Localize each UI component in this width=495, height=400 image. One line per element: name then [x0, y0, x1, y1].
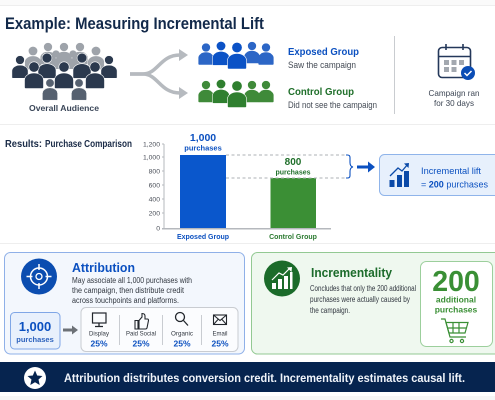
- text: incrementality description: the campaign.: [310, 306, 350, 315]
- value: 800 purchases: 800: [285, 157, 302, 168]
- y axis: [143, 142, 164, 232]
- bar: exposed group: [180, 155, 226, 228]
- labels: channels: Email: [212, 330, 228, 338]
- icon: control group people: [198, 79, 274, 108]
- arrow: to touchpoints: [63, 326, 78, 334]
- icon: rising bars: [390, 163, 409, 187]
- panel: attribution: [4, 252, 244, 354]
- arrows: audience split: [130, 49, 188, 99]
- text: attribution description: [72, 276, 192, 305]
- callout: incremental lift: [380, 154, 495, 196]
- text: campaign duration: [428, 88, 480, 108]
- panel: incrementality: [252, 252, 495, 354]
- text: control group: [288, 86, 377, 110]
- box: 200 additional purchases: [420, 262, 492, 346]
- box: 200 additional purchases: purchases: [435, 304, 478, 314]
- heading: incrementality: Incrementality: [311, 265, 393, 280]
- values: 25% shares: 25%: [173, 338, 191, 348]
- labels: channels: Paid Social: [126, 330, 156, 338]
- labels: channels: [89, 330, 228, 338]
- icon: search: [176, 312, 188, 326]
- icon: star: [24, 367, 46, 389]
- values: 25% shares: 25%: [211, 338, 229, 348]
- box: 200 additional purchases: additional: [436, 294, 476, 304]
- callout: incremental lift: Incremental lift: [421, 166, 481, 177]
- box: 1,000 purchases: 1,000: [19, 319, 51, 334]
- callout: incremental lift: = 200 purchases: [421, 180, 488, 190]
- icon: exposed group people: [198, 41, 274, 69]
- y axis: 1,200: [143, 142, 160, 148]
- bar chart: purchase comparison: [143, 132, 347, 241]
- heading: results: Results:: [5, 138, 42, 150]
- y axis: 400: [149, 196, 160, 204]
- brace: difference: [346, 155, 353, 178]
- icon: calendar: [438, 44, 475, 80]
- values: 25% shares: [90, 338, 229, 348]
- text: exposed group: [288, 46, 359, 70]
- box: 200 additional purchases: 200: [432, 266, 480, 298]
- y axis: 200: [149, 210, 160, 218]
- icon: shopping cart: [441, 319, 468, 343]
- values: 25% shares: 25%: [132, 338, 150, 348]
- heading: attribution: Attribution: [72, 260, 135, 275]
- box: touchpoints: [81, 308, 238, 352]
- category labels: [177, 234, 317, 241]
- y axis: 800: [149, 168, 160, 176]
- text: exposed group: Saw the campaign: [288, 60, 356, 70]
- text: incrementality description: purchases were actually caused by: [310, 295, 410, 304]
- category labels: Exposed Group: [177, 234, 229, 241]
- value: 800 purchases: purchases: [275, 170, 311, 176]
- text: attribution description: the campaign, then distribute credit: [72, 286, 185, 295]
- box: 1,000 purchases: purchases: [16, 335, 54, 344]
- text: attribution description: across touchpoints and platforms.: [72, 296, 179, 305]
- value: 1,000 purchases: 1,000: [190, 132, 216, 144]
- text: incrementality description: [310, 284, 416, 315]
- values: 25% shares: 25%: [90, 338, 108, 348]
- category labels: Control Group: [269, 234, 317, 241]
- text: incrementality description: Concludes that only the 200 additional: [310, 284, 416, 293]
- y axis: 1,000: [143, 154, 160, 162]
- text: control group: Control Group: [288, 86, 354, 98]
- arrow: to incremental lift: [357, 162, 375, 172]
- value: 800 purchases: [275, 157, 311, 176]
- labels: channels: Display: [89, 330, 110, 338]
- icon: growth chart: [264, 260, 300, 296]
- text: control group: Did not see the campaign: [288, 100, 377, 110]
- icon: target: [21, 258, 57, 294]
- text: attribution description: May associate all 1,000 purchases with: [72, 276, 192, 285]
- value: 1,000 purchases: purchases: [184, 144, 222, 152]
- icon: email: [214, 315, 226, 324]
- icon: thumbs up: [135, 314, 148, 329]
- labels: channels: Organic: [171, 330, 194, 338]
- title: Example: Measuring Incremental Lift: [5, 15, 264, 33]
- text: exposed group: Exposed Group: [288, 46, 359, 58]
- y axis: 0: [156, 226, 160, 232]
- value: 1,000 purchases: [184, 132, 222, 152]
- heading: results: Purchase Comparison: [45, 139, 132, 150]
- icon: overall audience crowd: [12, 43, 117, 100]
- heading: results: [5, 138, 132, 150]
- box: 1,000 purchases: [10, 312, 60, 349]
- bar: control group: [270, 178, 316, 228]
- text: campaign duration: Campaign ran: [428, 88, 480, 98]
- banner: key takeaway: [0, 362, 495, 392]
- label: overall audience: Overall Audience: [29, 103, 99, 113]
- y axis: 600: [149, 182, 160, 190]
- icon: display: [92, 313, 106, 326]
- text: campaign duration: for 30 days: [434, 98, 474, 108]
